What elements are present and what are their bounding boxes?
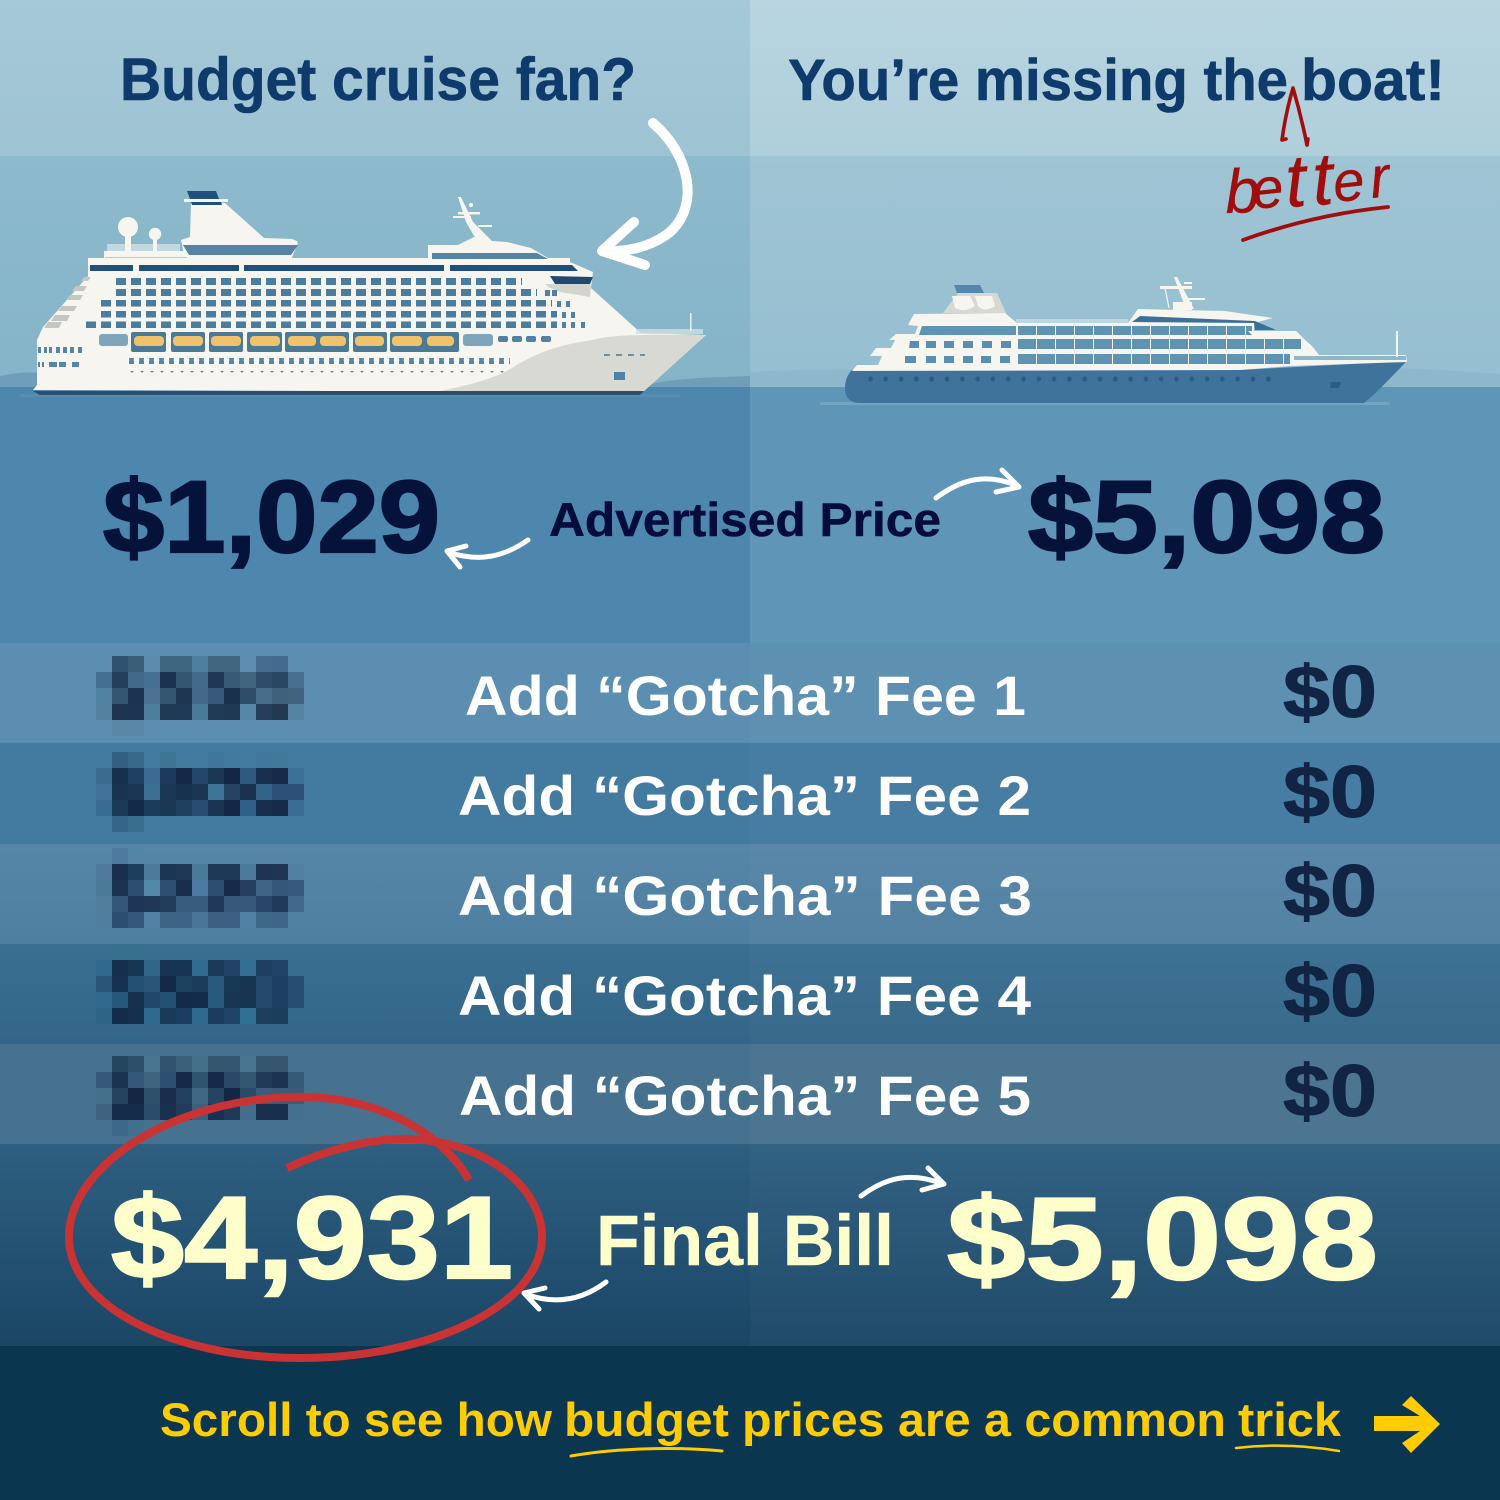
call to action text xyxy=(160,1393,1342,1446)
final bill right amount: $5,098 xyxy=(947,1173,1378,1304)
panoramic windows xyxy=(1018,326,1301,364)
final bill panel xyxy=(0,1144,1500,1346)
fee amounts: $0 xyxy=(1283,752,1377,833)
red hand-drawn circle xyxy=(69,1097,542,1358)
decks xyxy=(852,309,1407,371)
cruise ship: budget liner xyxy=(20,191,706,397)
background panels xyxy=(0,0,1500,643)
handwritten correction: better: t xyxy=(1309,136,1339,221)
fee amounts: $0 xyxy=(1283,851,1377,932)
fee amounts: $0 xyxy=(1283,1051,1377,1132)
fee amounts: $0 xyxy=(1283,951,1377,1032)
call to action text: trick xyxy=(1238,1393,1342,1446)
blurred price row 2 xyxy=(96,752,304,832)
big white arrow pointing to budget ship xyxy=(602,123,688,265)
fee row backgrounds xyxy=(0,643,1500,1144)
final bill left amount: $4,931 xyxy=(111,1172,513,1303)
fee labels: Add “Gotcha” Fee 3 xyxy=(458,864,1032,927)
headline right: boat! xyxy=(1301,48,1445,113)
lifeboat deck xyxy=(99,332,551,352)
final bill label: Final Bill xyxy=(596,1202,894,1281)
arrow to right final amount xyxy=(861,1168,944,1196)
fee labels: Add “Gotcha” Fee 5 xyxy=(459,1064,1031,1127)
fee amounts xyxy=(1283,652,1377,1132)
yellow arrow xyxy=(1374,1396,1440,1453)
mast xyxy=(1160,277,1205,310)
fee labels: Add “Gotcha” Fee 4 xyxy=(458,964,1031,1027)
cruise ship: premium small ship xyxy=(820,277,1407,405)
advertised price label: Advertised Price xyxy=(549,493,941,546)
underline budget xyxy=(571,1449,722,1456)
funnel xyxy=(943,285,1006,313)
arrow to left final amount xyxy=(524,1282,606,1309)
arrow to right price xyxy=(936,470,1019,498)
advertised price right: $5,098 xyxy=(1028,460,1385,574)
handwritten correction: better: b xyxy=(1224,157,1261,227)
underline trick xyxy=(1236,1446,1339,1451)
handwritten correction: better xyxy=(1224,88,1395,240)
handwritten correction: better: e xyxy=(1330,148,1367,214)
cabin windows xyxy=(86,278,557,328)
handwritten correction: better: e xyxy=(1249,155,1286,221)
handwritten correction: better: r xyxy=(1367,144,1395,211)
superstructure with funnel xyxy=(88,191,578,271)
blurred price row 1 xyxy=(96,656,304,736)
fee amounts: $0 xyxy=(1283,652,1377,733)
blurred price row 5 xyxy=(96,1056,304,1136)
handwritten correction: better: t xyxy=(1282,138,1312,223)
headline right: You’re missing the xyxy=(788,48,1288,113)
forward porthole dots xyxy=(545,290,585,328)
bridge and mast xyxy=(428,197,703,334)
call to action text: Scroll to see how xyxy=(160,1393,552,1446)
footer band xyxy=(0,1346,1500,1500)
fee labels xyxy=(458,664,1032,1127)
arrow to left price xyxy=(447,540,528,567)
aft stairs xyxy=(44,277,91,328)
fee labels: Add “Gotcha” Fee 1 xyxy=(465,664,1026,727)
fee labels: Add “Gotcha” Fee 2 xyxy=(458,764,1031,827)
portholes xyxy=(868,374,1280,386)
call to action text: budget xyxy=(564,1393,729,1446)
hull portholes xyxy=(38,347,645,380)
pixelated blurred prices xyxy=(96,656,304,1136)
blurred price row 3 xyxy=(96,848,304,928)
right half tint seam xyxy=(750,643,1500,1346)
call to action text: prices are a common xyxy=(742,1393,1226,1446)
blurred price row 4 xyxy=(96,944,304,1024)
advertised price left: $1,029 xyxy=(103,460,440,574)
headline left: Budget cruise fan? xyxy=(120,46,636,113)
